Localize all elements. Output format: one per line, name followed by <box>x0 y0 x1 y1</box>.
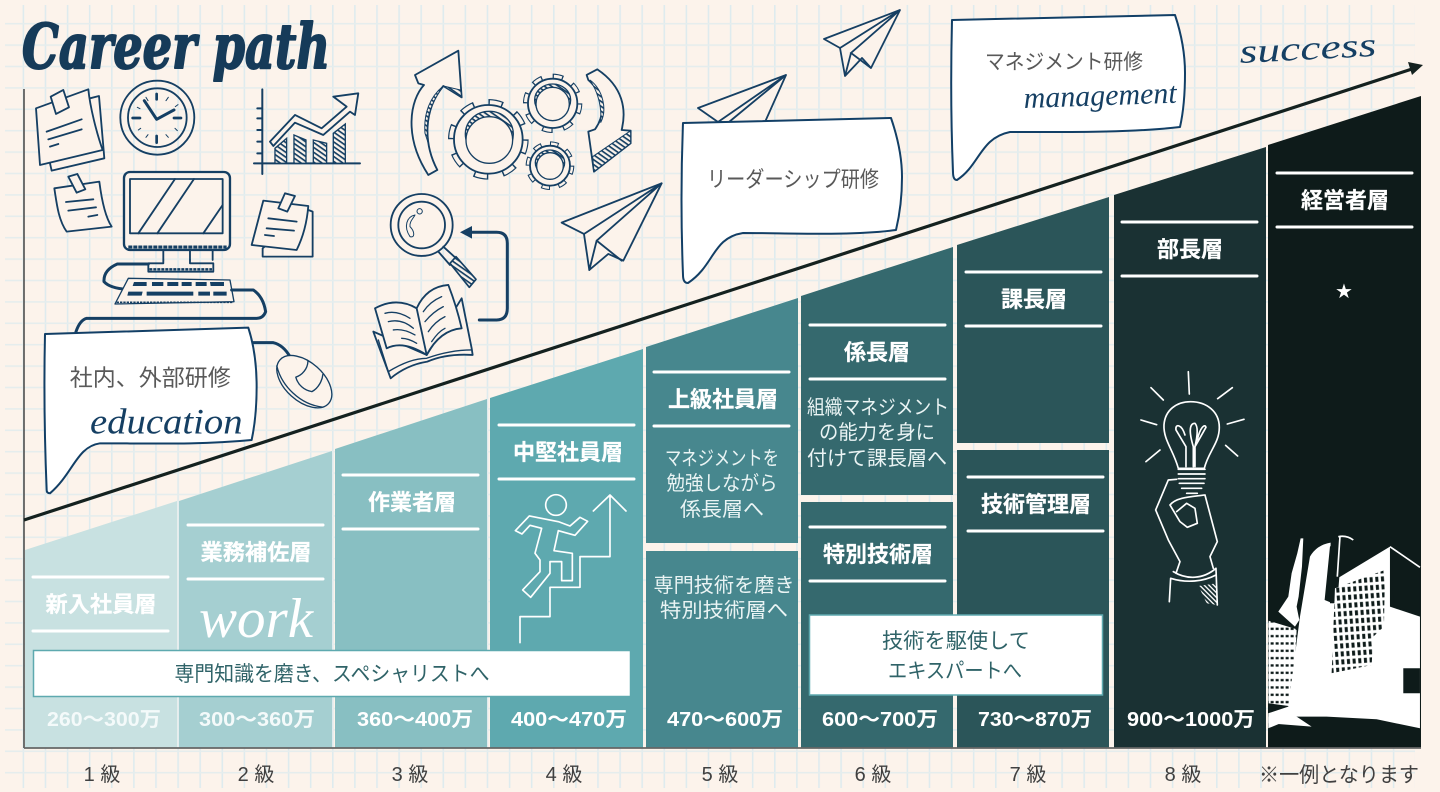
icon: light bulb in hand <box>1141 372 1244 605</box>
callout: expert path: 技術を駆使して <box>882 630 1030 653</box>
salary: grade 8: 900〜1000万 <box>1127 709 1255 731</box>
axis labels: grades: 5 級 <box>702 763 738 786</box>
text: in-house and external training: 社内、外部研修 <box>70 365 231 391</box>
panel: grade 5 column <box>646 298 798 748</box>
heading: grade 8 role: 部長層 <box>1157 237 1223 262</box>
text: management study note 2: 勉強しながら <box>666 472 778 495</box>
text: technical skill note: 専門技術を磨き <box>654 574 794 597</box>
panel: grade 4 column <box>490 349 643 748</box>
icon: curved arrow down <box>587 69 631 172</box>
arrow: book to magnifier <box>460 226 507 320</box>
callout: expert path: エキスパートへ <box>888 660 1022 683</box>
axis labels: grades: 6 級 <box>855 763 891 786</box>
salary: grade 3: 360〜400万 <box>357 709 473 731</box>
callout: expert path <box>810 615 1102 695</box>
icon: sticky note left <box>54 174 112 232</box>
text: technical skill note 2: 特別技術層へ <box>660 599 788 622</box>
panel: grade 7 column <box>957 197 1109 748</box>
text: management study note: マネジメントを <box>665 448 779 470</box>
heading: grade 3 role: 作業者層 <box>368 490 456 515</box>
heading: technical management role: 技術管理層 <box>981 492 1091 517</box>
heading: executive role: 経営者層 <box>1301 188 1389 213</box>
salary: grade 6: 600〜700万 <box>822 709 938 731</box>
heading: grade 1 role: 新入社員層 <box>46 592 156 617</box>
icon: paper plane behind bubble <box>698 75 786 122</box>
axis labels: grades: 2 級 <box>238 763 274 786</box>
panel: grade 8 column <box>1114 147 1266 748</box>
heading: grade 4 role: 中堅社員層 <box>513 440 623 465</box>
callout: training bubble <box>44 328 257 493</box>
icon: sticky note right <box>252 193 313 257</box>
arrow: career growth diagonal <box>24 62 1423 520</box>
callout: specialist path: 専門知識を磨き、スペシャリストへ <box>174 663 490 686</box>
axis labels: grades: ※一例となります <box>1259 764 1419 787</box>
salary: grade 5: 470〜600万 <box>667 709 783 731</box>
icon: stacked papers <box>36 89 104 171</box>
script word: education: education <box>90 401 243 441</box>
panel: top executive column <box>1268 96 1421 748</box>
text: leadership training: リーダーシップ研修 <box>707 167 879 192</box>
icon: person climbing stairs <box>515 495 626 643</box>
heading: grade 5 role: 上級社員層 <box>668 387 778 412</box>
salary: grade 2: 300〜360万 <box>199 709 315 731</box>
icon: paper plane low <box>562 183 662 270</box>
heading: grade 7 role: 課長層 <box>1001 287 1067 312</box>
panel: grade 6 column <box>801 247 953 748</box>
panel: grade 2 column <box>179 451 332 748</box>
icon: gears <box>452 77 579 187</box>
axis labels: grades: 4 級 <box>546 763 582 786</box>
text: organization note 2: の能力を身に <box>819 421 935 444</box>
script word: management: management <box>1023 77 1178 115</box>
axis labels: grades: 3 級 <box>392 763 428 786</box>
axis labels: grades: 7 級 <box>1010 763 1046 786</box>
callout: specialist path <box>34 650 630 696</box>
title: Career path <box>22 10 330 83</box>
text: organization note: 組織マネジメント <box>807 396 949 419</box>
text: management study note 3: 係長層へ <box>680 498 764 521</box>
callout: leadership training bubble <box>682 118 902 283</box>
axis labels: grades <box>84 763 1419 787</box>
salary: grade 4: 400〜470万 <box>511 709 627 731</box>
icon: star: ★ <box>1335 279 1353 303</box>
panel: grade 3 column <box>335 399 487 748</box>
icon: curved arrow up <box>412 51 462 175</box>
icon: growth chart <box>254 89 360 174</box>
axis labels: grades: 1 級 <box>84 763 120 786</box>
text: organization note 3: 付けて課長層へ <box>807 447 947 470</box>
icon: computer with cables and mouse <box>76 172 342 418</box>
icon: magnifying glass <box>391 194 476 287</box>
axis labels: grades: 8 級 <box>1165 763 1201 786</box>
image: office building silhouette <box>1268 536 1420 728</box>
icon: open book <box>373 285 473 378</box>
text: management training: マネジメント研修 <box>985 51 1143 74</box>
heading: grade 6 role: 係長層 <box>844 340 910 365</box>
panel: grade 1 column <box>25 501 177 748</box>
icon: wall clock <box>120 81 194 155</box>
icon: paper plane high <box>824 10 900 76</box>
callout: management training bubble <box>951 15 1185 180</box>
heading: special technical role: 特別技術層 <box>823 542 933 567</box>
salary: grade 1: 260〜300万 <box>47 709 161 731</box>
script word: work: work <box>199 588 314 650</box>
heading: grade 2 role: 業務補佐層 <box>200 540 312 565</box>
script word: success: success <box>1238 27 1377 71</box>
salary: grade 7: 730〜870万 <box>978 709 1092 731</box>
